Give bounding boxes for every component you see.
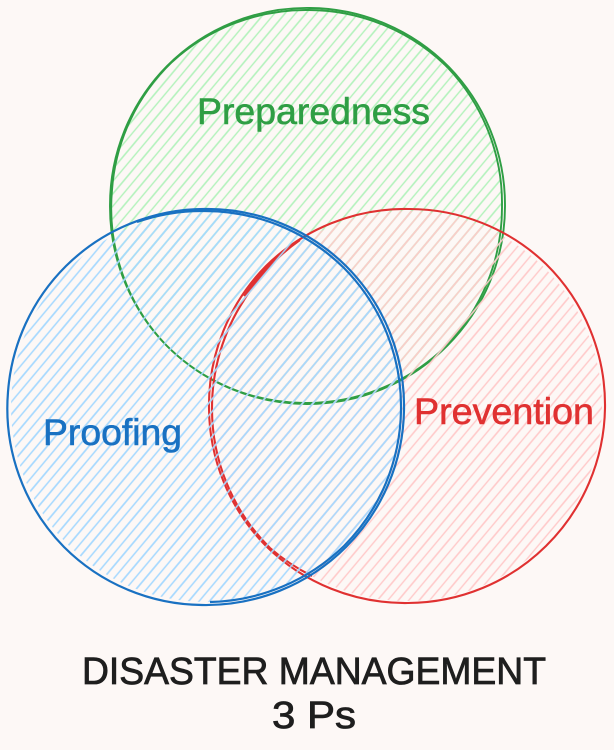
label: Proofing: Proofing [43,412,182,453]
title line 2: 3 Ps [272,695,356,737]
label: Prevention: Prevention [414,391,594,432]
title line 1: DISASTER MANAGEMENT [82,651,546,693]
circle: Preparedness [110,8,505,404]
circle: Proofing [7,209,404,605]
title [82,651,546,737]
circle: Prevention [209,209,605,603]
label: Preparedness: Preparedness [197,91,430,132]
